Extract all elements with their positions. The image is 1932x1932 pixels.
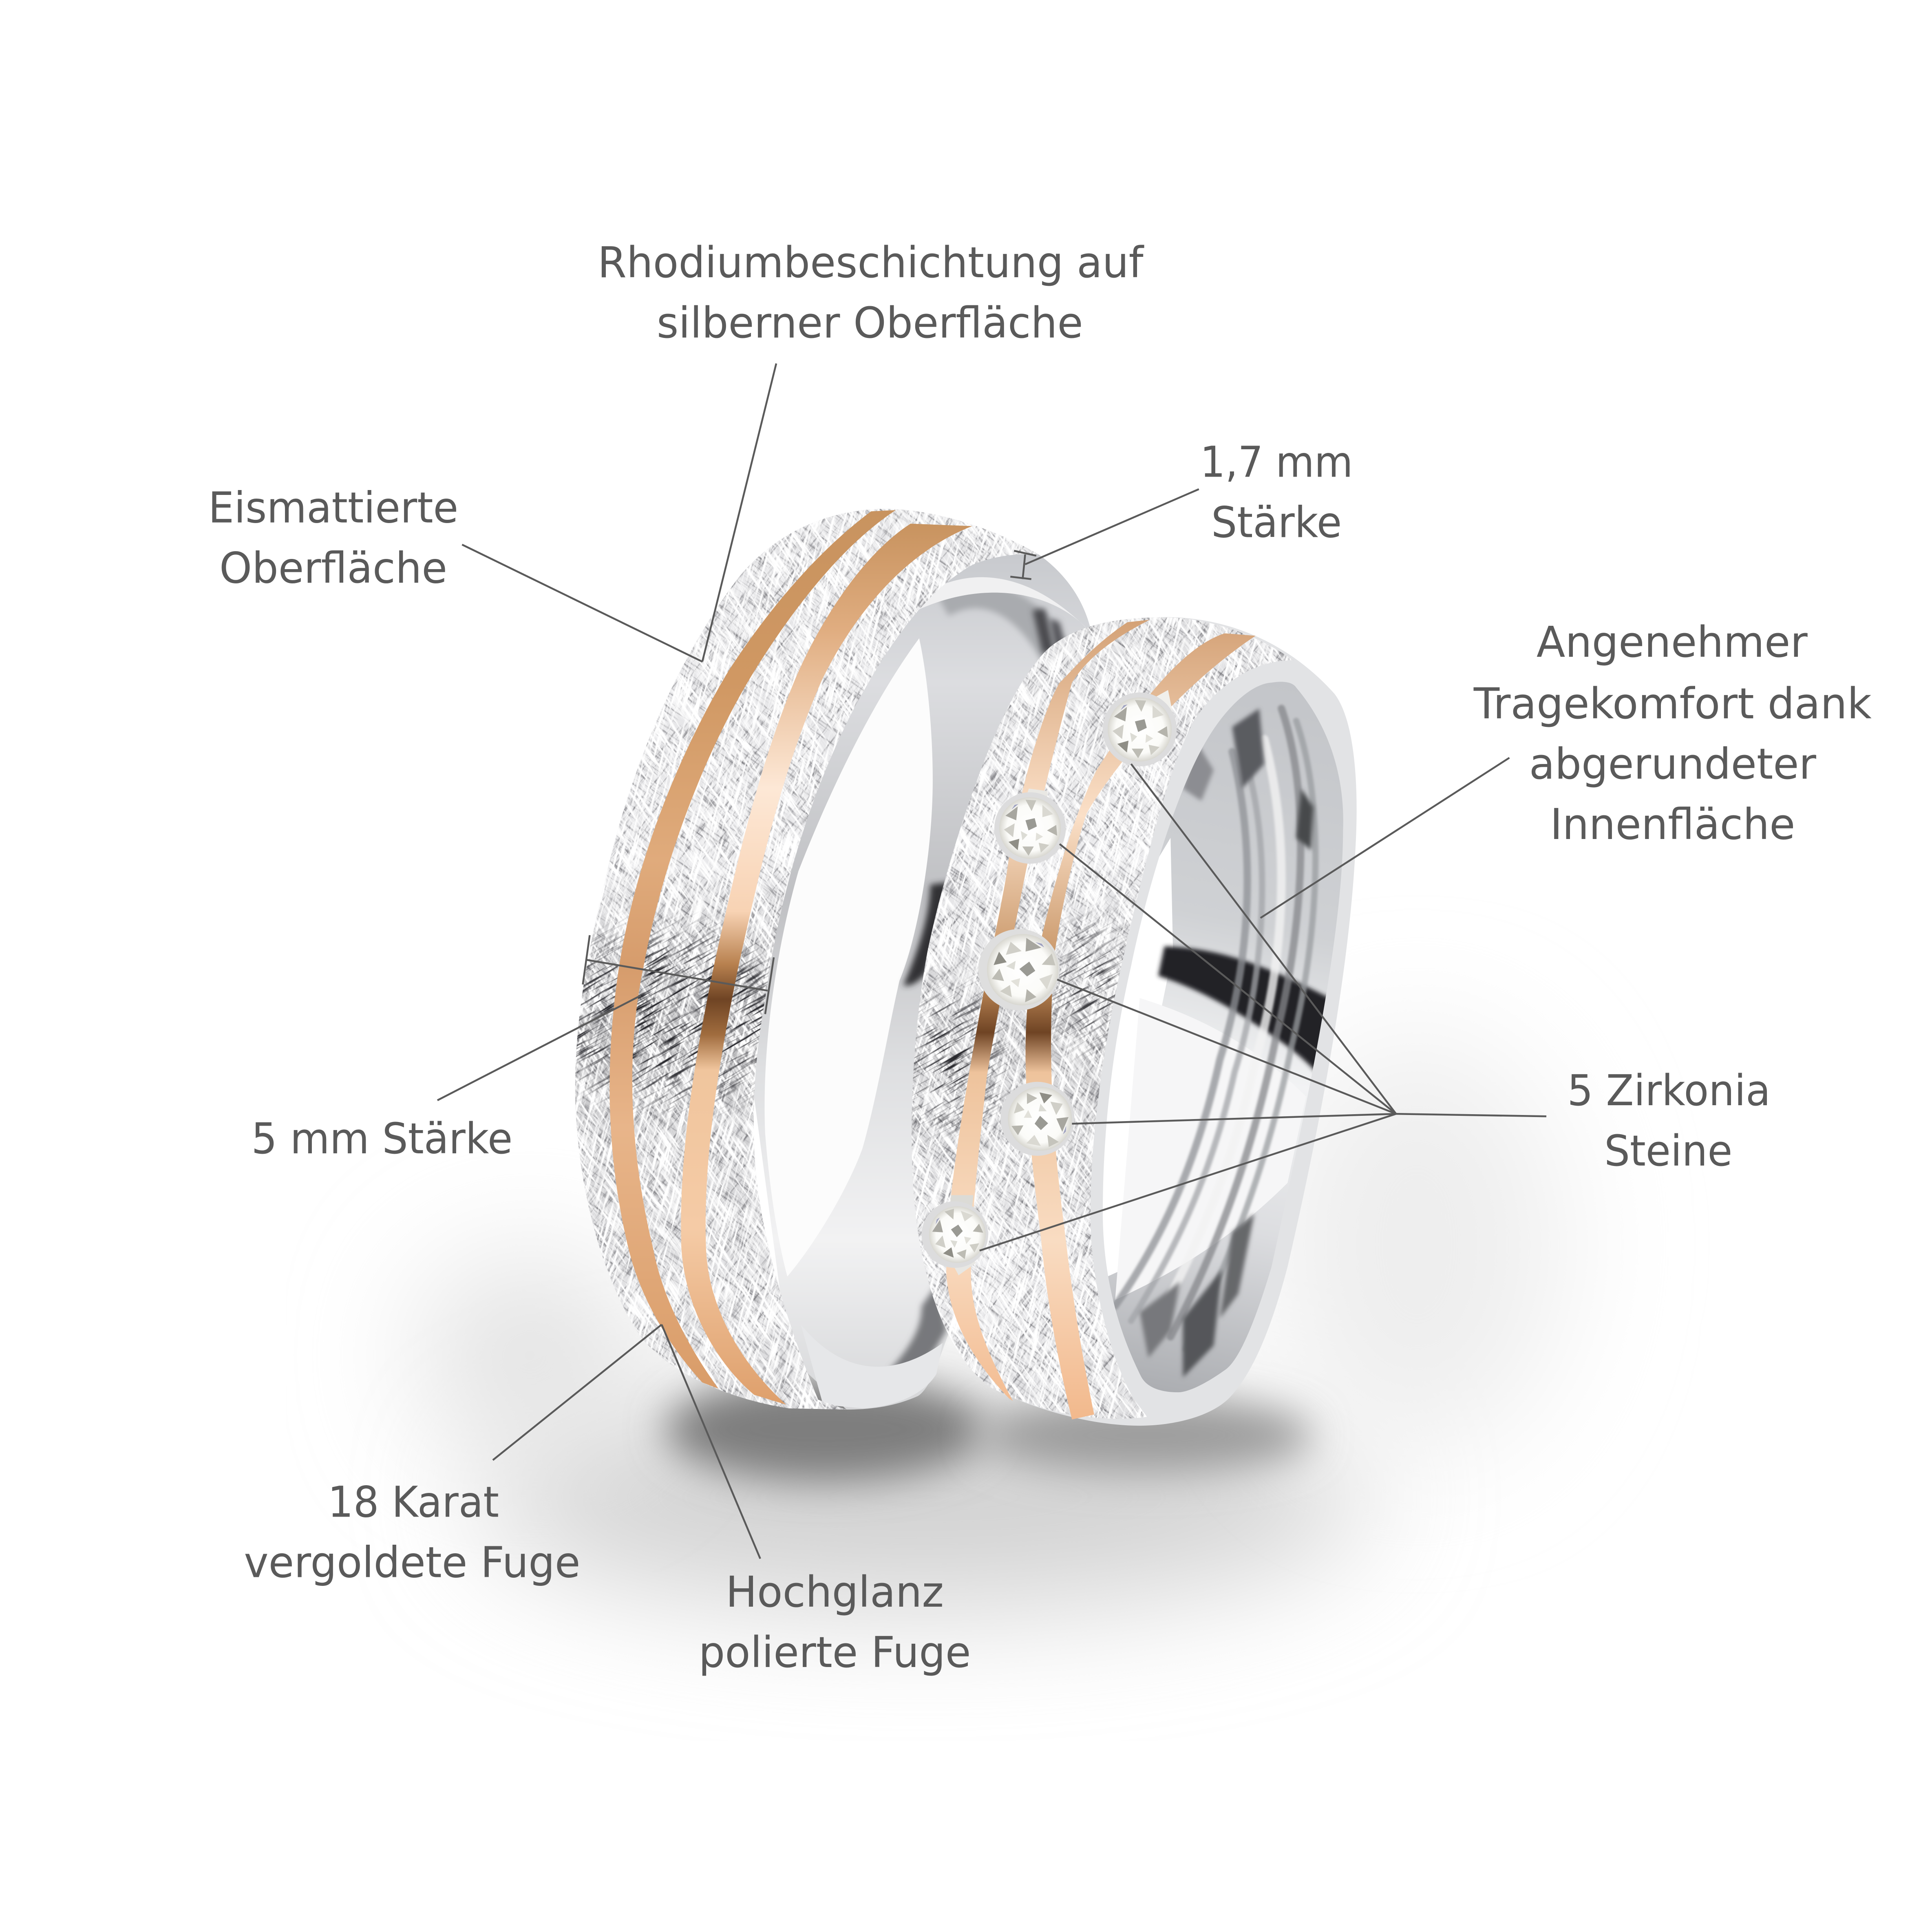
small ring: white gap	[1097, 838, 1173, 1281]
stone 1	[1103, 690, 1177, 766]
zirconia stones	[922, 690, 1177, 1275]
large ring: opening	[764, 638, 933, 1276]
groove one	[946, 620, 1150, 1401]
stone 3	[978, 929, 1064, 1010]
large ring: upper inner reflections	[918, 577, 1089, 671]
label: Angenehmer Tragekomfort: Innenfläche	[1550, 799, 1795, 849]
lines: 5 Zirkonia Steine	[980, 764, 1546, 1251]
label: Eismattierte Oberfläche: Eismattierte	[208, 483, 458, 532]
label: Angenehmer Tragekomfort	[1473, 617, 1872, 849]
callout lines	[437, 364, 1546, 1559]
line: Angenehmer Tragekomfort	[1261, 758, 1509, 918]
label: Eismattierte Oberfläche	[208, 483, 458, 593]
label: 5 Zirkonia Steine: 5 Zirkonia	[1567, 1066, 1771, 1115]
label: 5 Zirkonia Steine: Steine	[1604, 1126, 1732, 1176]
small ring: inner surface	[1103, 682, 1343, 1393]
label: 18 Karat vergoldete Fuge: 18 Karat	[328, 1477, 499, 1527]
large ring: dark reflection	[903, 882, 949, 986]
label: Hochglanz polierte Fuge: Hochglanz	[726, 1567, 944, 1617]
label: Angenehmer Tragekomfort: abgerundeter	[1529, 739, 1816, 789]
small ring: black reflection band	[1158, 946, 1349, 1087]
label: 18 Karat vergoldete Fuge: vergoldete Fuge	[244, 1538, 581, 1588]
label: Rhodiumbeschichtung	[598, 238, 1144, 348]
line: 5 mm Stärke with measure	[437, 935, 774, 1100]
label: 5 mm Stärke: 5 mm Stärke	[252, 1114, 512, 1164]
stone 2	[994, 788, 1066, 864]
line: Hochglanz polierte Fuge	[662, 1325, 760, 1559]
small ring: textured face	[912, 617, 1294, 1419]
groove two	[681, 523, 972, 1404]
line: 1,7 mm Stärke with measure	[1010, 489, 1199, 579]
groove one	[609, 510, 896, 1389]
label: Angenehmer Tragekomfort: Tragekomfort dank	[1473, 679, 1872, 729]
small ring: bright floor	[1115, 998, 1306, 1300]
large ring: body and inner surface	[739, 552, 1109, 1410]
label: 1,7 mm Stärke: 1,7 mm	[1200, 437, 1353, 487]
label: Angenehmer Tragekomfort: Angenehmer	[1537, 617, 1808, 667]
stone 5	[922, 1195, 989, 1275]
rose gold grooves: small ring	[946, 620, 1256, 1420]
line: Rhodiumbeschichtung	[702, 364, 776, 662]
label: 5 Zirkonia Steine	[1567, 1066, 1771, 1176]
label: 1,7 mm Stärke	[1200, 437, 1353, 548]
label: Rhodiumbeschichtung: silberner Oberfläche	[657, 298, 1083, 348]
label: Hochglanz polierte Fuge: polierte Fuge	[699, 1627, 971, 1677]
large ring	[575, 509, 1109, 1410]
small ring	[912, 617, 1368, 1426]
rose gold grooves: large ring	[609, 510, 972, 1404]
label: Rhodiumbeschichtung: Rhodiumbeschichtung auf	[598, 238, 1144, 287]
label: Hochglanz polierte Fuge	[699, 1567, 971, 1677]
label: 1,7 mm Stärke: Stärke	[1211, 498, 1342, 548]
line: Eismattierte Oberfläche	[462, 545, 702, 662]
large ring: textured face	[575, 509, 1039, 1410]
groove two	[1026, 633, 1256, 1420]
label: 18 Karat vergoldete Fuge	[244, 1477, 581, 1588]
infographic: wedding rings with callouts	[212, 245, 1871, 1676]
large ring: lower inner surface	[801, 1281, 946, 1409]
line: 18 Karat vergoldete Fuge	[493, 1325, 662, 1460]
small ring: rim	[912, 617, 1357, 1426]
label: Eismattierte Oberfläche: Oberfläche	[219, 543, 447, 593]
small ring: inner grooves	[1115, 709, 1316, 1349]
small ring: inner dark reflections	[1140, 709, 1314, 1378]
stone 4	[1000, 1080, 1078, 1158]
floor shadow	[419, 1035, 1565, 1608]
